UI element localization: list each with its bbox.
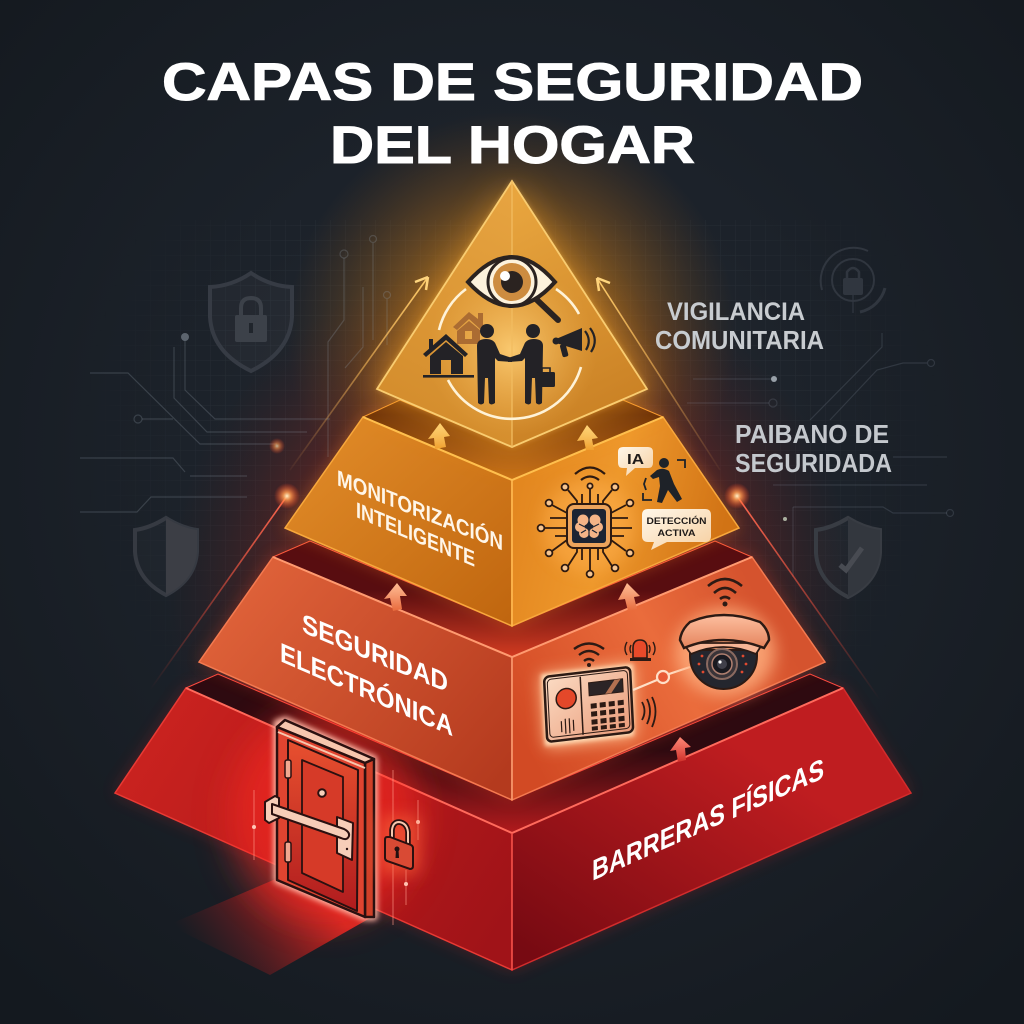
icon: camera wifi bbox=[708, 579, 742, 606]
camera cap bbox=[680, 615, 769, 648]
centre highlight bbox=[427, 265, 597, 435]
label: monitorizacion inteligente: INTELIGENTE bbox=[356, 497, 475, 572]
door inset panel bbox=[302, 760, 343, 892]
icon: reinforced door bbox=[265, 720, 374, 917]
tier 1: vigilancia comunitaria bbox=[372, 181, 652, 452]
icon: sound waves from keypad bbox=[642, 697, 656, 727]
top ledge of tier 3 bbox=[273, 541, 752, 657]
top ledge of tier 2 bbox=[363, 400, 663, 480]
icon: siren bbox=[625, 640, 655, 660]
icon: padlock bbox=[380, 816, 420, 874]
left face of apex bbox=[377, 181, 512, 447]
door frame face bbox=[277, 727, 365, 917]
side label: vigilancia comunitaria: VIGILANCIA bbox=[667, 298, 805, 326]
faded shield with check mark, lower right bbox=[816, 518, 880, 597]
icon: alarm keypad bbox=[540, 663, 636, 748]
icon: handshake people bbox=[477, 324, 543, 404]
left face of tier 2 bbox=[285, 417, 512, 626]
tier 2: monitorizacion inteligente bbox=[285, 360, 739, 626]
side label: vigilancia comunitaria bbox=[655, 298, 824, 355]
security bar bbox=[265, 796, 353, 860]
callout: deteccion activa bbox=[642, 509, 711, 550]
callout: ia: IA bbox=[627, 452, 645, 468]
arrow: tier 4 to tier 3 bbox=[670, 737, 691, 762]
title bbox=[162, 53, 863, 175]
top ledge of base tier bbox=[186, 674, 843, 833]
right face of base tier bbox=[512, 688, 911, 970]
tier 4: barreras fisicas bbox=[115, 620, 911, 970]
side label: plano de seguridad: SEGURIDADA bbox=[735, 448, 892, 478]
background tech grid bbox=[190, 220, 834, 562]
icon: back house bbox=[453, 312, 484, 344]
faded half shield, lower left bbox=[135, 518, 197, 595]
icon: megaphone bbox=[552, 328, 595, 358]
faded shield with padlock, top left bbox=[210, 273, 292, 371]
connector between keypad and camera bbox=[633, 667, 690, 690]
circuit traces left bbox=[80, 236, 390, 512]
side label: plano de seguridad: PAIBANO DE bbox=[735, 419, 889, 449]
camera dome bbox=[690, 650, 757, 689]
side label: vigilancia comunitaria: COMUNITARIA bbox=[655, 325, 824, 355]
ground light under door bbox=[168, 878, 372, 975]
community ring bbox=[439, 289, 581, 419]
left face of base tier bbox=[115, 688, 512, 970]
door top edge and side bbox=[277, 720, 374, 763]
circuit traces right bbox=[687, 290, 954, 577]
label: seguridad electronica bbox=[280, 608, 453, 742]
chip nodes bbox=[538, 483, 633, 577]
icon: person detected bbox=[643, 458, 685, 503]
right face of apex bbox=[512, 181, 647, 447]
guide lines with glowing end points bbox=[150, 277, 880, 700]
faded padlock emblem, top right bbox=[821, 248, 885, 312]
chip body bbox=[567, 504, 611, 548]
callout: ia bbox=[618, 447, 653, 476]
camera collar bbox=[683, 643, 763, 654]
chip traces bbox=[545, 489, 632, 570]
right face of tier 3 bbox=[512, 557, 825, 800]
side label: plano de seguridad bbox=[735, 419, 892, 478]
right face of tier 2 bbox=[512, 417, 739, 626]
door leaf bbox=[288, 740, 358, 911]
brain bbox=[575, 514, 603, 538]
red wall glow and light streaks around door bbox=[230, 710, 420, 925]
label: seguridad electronica: SEGURIDAD bbox=[302, 608, 448, 698]
callout: deteccion activa: DETECCIÓN bbox=[646, 515, 707, 527]
door knob bbox=[318, 789, 326, 797]
label: seguridad electronica: ELECTRÓNICA bbox=[280, 636, 453, 742]
icon: eye with magnifier bbox=[468, 257, 558, 320]
title: CAPAS DE SEGURIDAD bbox=[162, 53, 863, 112]
arrows: tier 2 to tier 1 bbox=[428, 423, 598, 450]
chip wifi bbox=[575, 468, 605, 480]
icon: dome camera bbox=[675, 608, 775, 696]
label: barreras fisicas: BARRERAS FÍSICAS bbox=[592, 752, 824, 888]
callout: deteccion activa: ACTIVA bbox=[658, 528, 696, 539]
left face of tier 3 bbox=[199, 557, 512, 800]
tier 3: seguridad electronica bbox=[199, 500, 825, 800]
icon: front house bbox=[423, 334, 474, 378]
title: DEL HOGAR bbox=[330, 116, 695, 175]
icon: ai chip with brain bbox=[538, 468, 635, 577]
arrows: tier 3 to tier 2 bbox=[384, 583, 640, 611]
label: monitorizacion inteligente: MONITORIZACIÓN bbox=[337, 465, 503, 555]
icon: keypad wifi bbox=[574, 644, 604, 667]
door hinges bbox=[285, 760, 291, 862]
icon: briefcase bbox=[537, 368, 555, 387]
